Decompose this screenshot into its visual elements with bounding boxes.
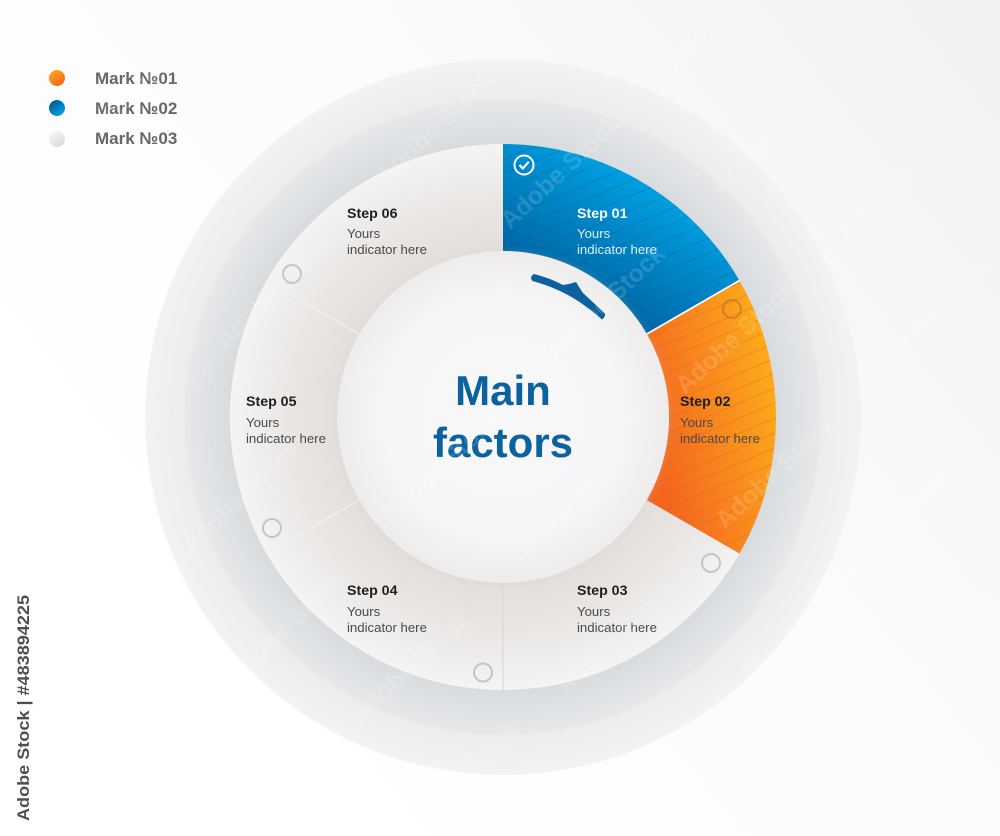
label: step 01: indicator here: [577, 242, 657, 257]
watermark pattern: Adobe Stock: [705, 75, 836, 199]
middle decorative ring: [185, 99, 821, 735]
watermark pattern: Adobe Stock: [550, 575, 681, 699]
label: step 05: [246, 394, 326, 446]
legend dot: mark 02: [49, 100, 65, 116]
watermark pattern: Adobe Stock: [15, 595, 146, 719]
marker: step 04: [474, 664, 492, 682]
legend: [49, 69, 177, 148]
stock id vertical text: Adobe Stock | #483894225: [14, 595, 33, 821]
watermark pattern: Adobe Stock: [335, 270, 466, 394]
label: step 04: indicator here: [347, 620, 427, 635]
watermark pattern: Adobe Stock: [0, 265, 131, 389]
label: step 06: Yours: [347, 226, 381, 241]
label: step 02: Step 02: [680, 394, 731, 410]
label: step 03: indicator here: [577, 620, 657, 635]
legend dot: mark 03: [49, 131, 65, 147]
label: step 03: Yours: [577, 604, 611, 619]
label: step 04: [347, 583, 427, 635]
label: step 05: Step 05: [246, 394, 297, 410]
label: step 04: Step 04: [347, 583, 398, 599]
watermark pattern: Adobe Stock: [830, 120, 961, 244]
watermark pattern: Adobe Stock: [220, 565, 351, 689]
watermark pattern: Adobe Stock: [495, 110, 626, 234]
watermark pattern: Adobe Stock: [670, 275, 801, 399]
segment dividers: [267, 280, 739, 690]
title: factors: [433, 419, 573, 466]
center circle: [337, 251, 669, 583]
legend label: mark 02: Mark №02: [95, 99, 177, 118]
label: step 05: Yours: [246, 415, 280, 430]
label: step 02: Yours: [680, 415, 714, 430]
watermark pattern: Adobe Stock: [375, 405, 506, 529]
label: step 06: Step 06: [347, 206, 398, 222]
watermark pattern: Adobe Stock: [345, 605, 476, 729]
label: step 06: [347, 206, 427, 257]
watermark pattern: Adobe Stock: [870, 250, 1000, 374]
label: step 01: Step 01: [577, 206, 628, 222]
watermark pattern: Adobe Stock: [675, 615, 806, 739]
label: step 06: indicator here: [347, 242, 427, 257]
label: step 03: [577, 583, 657, 635]
icon: gauge needle: [531, 274, 605, 320]
label: step 04: Yours: [347, 604, 381, 619]
segment: step 05: [230, 280, 359, 554]
watermark pattern: Adobe Stock: [505, 445, 636, 569]
watermark pattern: Adobe Stock: [210, 230, 341, 354]
marker: step 06: [283, 265, 301, 283]
watermark pattern: Adobe Stock: [165, 105, 296, 229]
watermark pattern: Adobe Stock: [710, 410, 841, 534]
legend dot: mark 01: [49, 70, 65, 86]
label: step 01: [577, 206, 657, 257]
label: step 02: [680, 394, 760, 446]
segment: step 03: [503, 500, 739, 690]
watermark pattern: Adobe Stock: [370, 65, 501, 189]
title: Main: [455, 367, 551, 414]
center circle shadow: [336, 251, 670, 585]
segment: step 02 orange: [647, 280, 776, 554]
watermark pattern: Adobe Stock: [55, 715, 186, 836]
watermark pattern: Adobe Stock: [835, 455, 966, 579]
marker: step 02: [723, 300, 741, 318]
label: step 03: Step 03: [577, 583, 628, 599]
donut chart: six steps: [230, 144, 776, 690]
legend label: mark 01: Mark №01: [95, 69, 177, 88]
icon: check mark badge: [514, 156, 534, 174]
marker: step 05: [263, 519, 281, 537]
label: step 05: indicator here: [246, 431, 326, 446]
label: step 02: indicator here: [680, 431, 760, 446]
outer decorative ring: [145, 59, 861, 775]
watermark pattern: Adobe Stock: [35, 60, 166, 184]
watermark pattern: Adobe Stock: [45, 395, 176, 519]
legend label: mark 03: Mark №03: [95, 129, 177, 148]
marker: step 03: [702, 554, 720, 572]
watermark pattern: Adobe Stock: [540, 240, 671, 364]
segment: step 01 blue: [503, 144, 740, 334]
segment: step 06: [267, 144, 503, 334]
segment: step 04: [267, 500, 503, 690]
watermark pattern: Adobe Stock: [175, 435, 306, 559]
label: step 01: Yours: [577, 226, 611, 241]
